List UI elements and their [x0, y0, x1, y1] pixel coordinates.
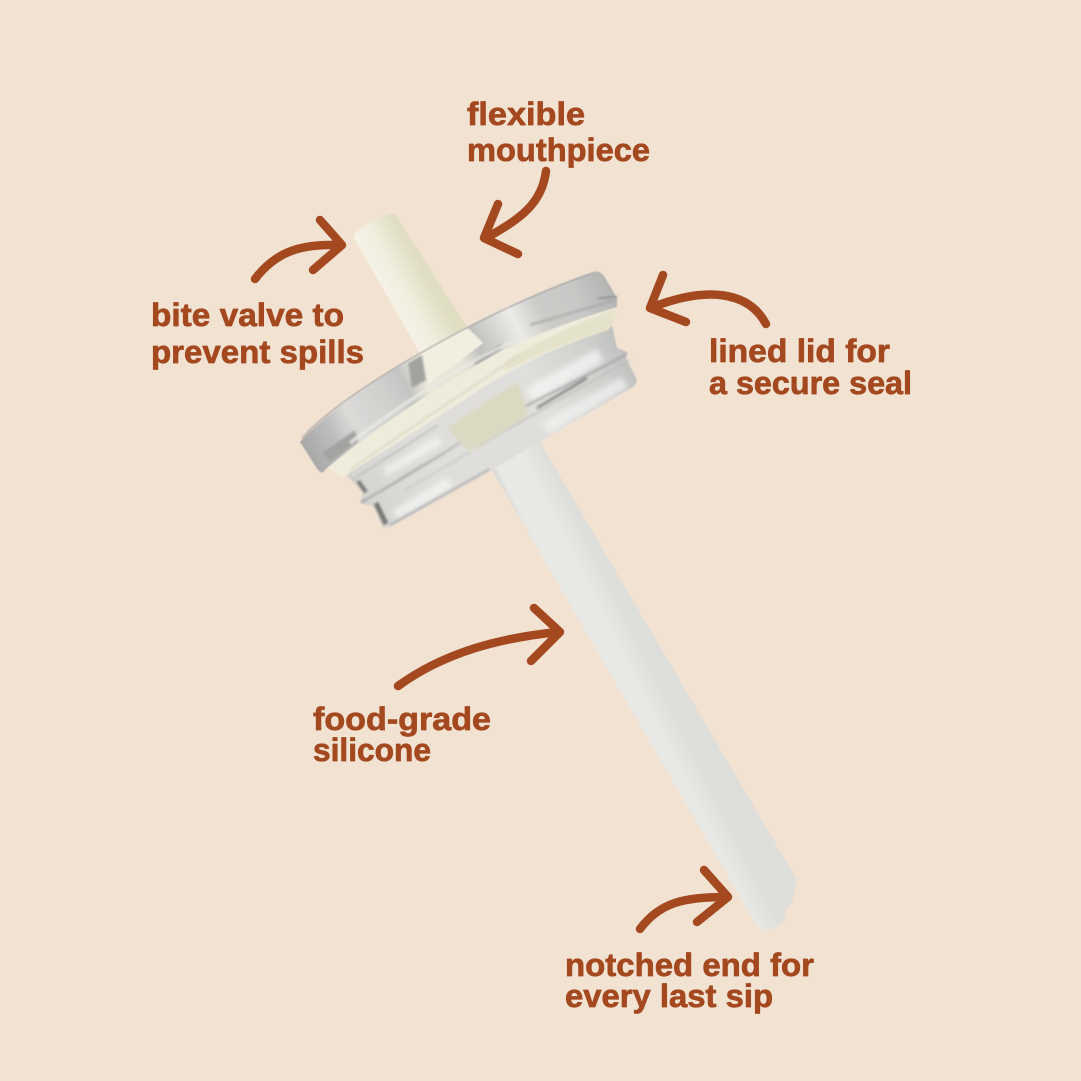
rim shadows and reflections — [302, 273, 617, 462]
label: flexible mouthpiece — [467, 96, 650, 168]
body reflections — [385, 355, 625, 515]
label: bite valve: bite valve to — [151, 297, 344, 333]
long silicone tube — [490, 442, 797, 932]
arrow: food-grade silicone — [398, 608, 560, 686]
cream mouthpiece — [354, 214, 490, 385]
label: notched end: notched end for — [565, 947, 814, 983]
product: straw lid — [300, 214, 797, 932]
label: food-grade silicone: silicone — [313, 732, 431, 768]
label: flexible mouthpiece: flexible — [467, 96, 585, 132]
label: lined lid: lined lid for — [709, 333, 890, 369]
label: bite valve — [151, 297, 364, 370]
label: bite valve: prevent spills — [151, 334, 364, 370]
label: flexible mouthpiece: mouthpiece — [467, 132, 650, 168]
label: food-grade silicone — [313, 701, 491, 768]
label: notched end — [565, 947, 814, 1014]
label: notched end: every last sip — [565, 978, 773, 1014]
arrow: bite valve — [255, 220, 342, 279]
cream silicone seal — [327, 307, 617, 478]
arrow: flexible mouthpiece — [484, 171, 546, 254]
cream base of mouthpiece inside rim — [420, 327, 483, 385]
arrow: lined lid — [650, 275, 766, 324]
label: lined lid: a secure seal — [709, 365, 912, 401]
body grooves — [352, 354, 630, 525]
label: food-grade silicone: food-grade — [313, 701, 491, 737]
cream stem seen through the body — [447, 382, 529, 452]
label: lined lid — [709, 333, 912, 401]
threaded lower body — [345, 325, 637, 528]
arrow: notched end — [640, 870, 728, 929]
clear lid rim — [300, 272, 617, 473]
